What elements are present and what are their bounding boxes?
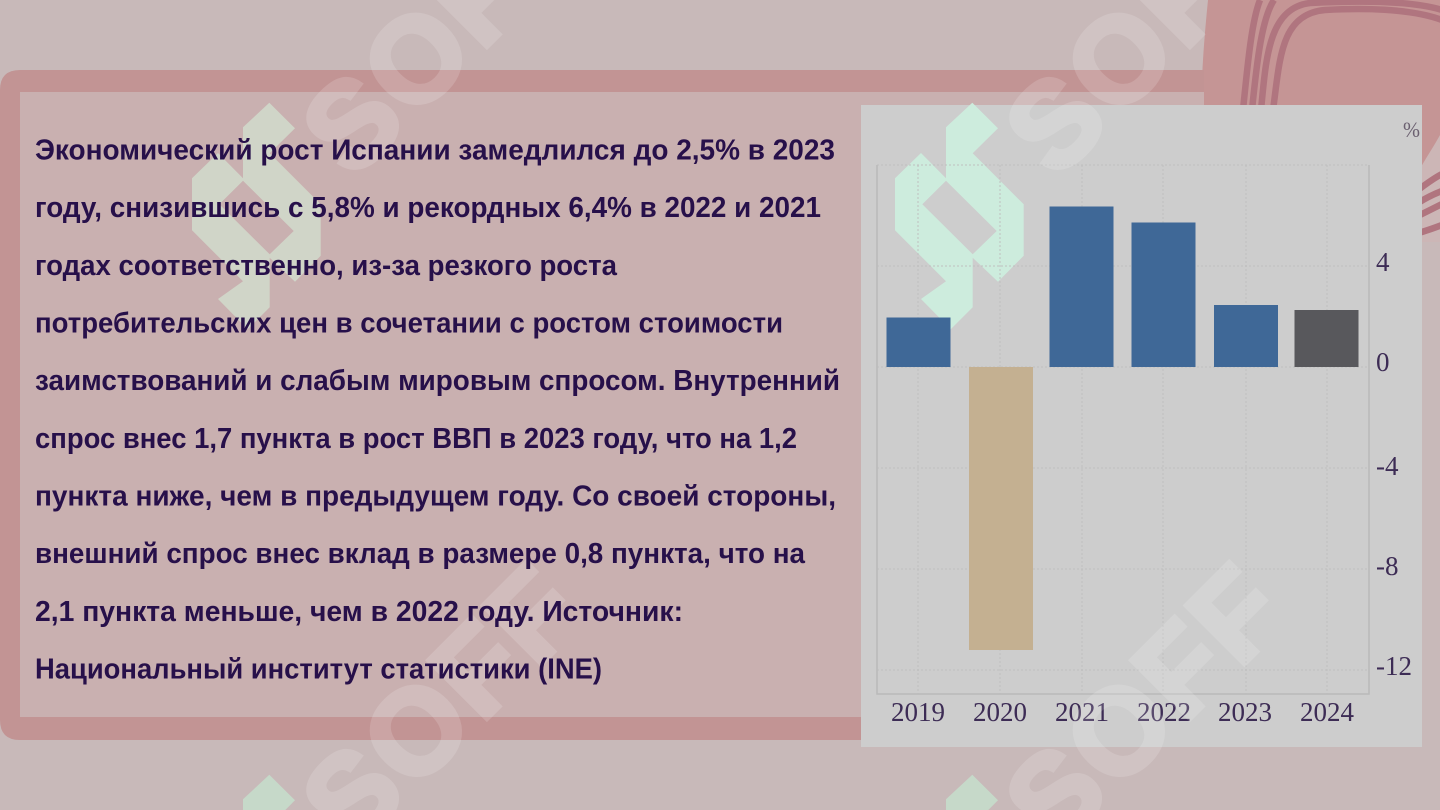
x-axis labels: 2020 (973, 697, 1027, 727)
bar 2023 (1214, 305, 1278, 367)
text block: внешний спрос внес вклад в размере 0,8 пункта, что на (35, 538, 806, 570)
x-axis labels (891, 697, 1354, 727)
text block: спрос внес 1,7 пункта в рост ВВП в 2023 году, что на 1,2 (35, 423, 797, 455)
panel: chart background (861, 105, 1422, 747)
y-axis labels: -8 (1376, 551, 1398, 581)
text block: Экономический рост Испании замедлился до 2,5% в 2023 (35, 134, 835, 166)
bar 2019 (886, 318, 950, 367)
text block: пункта ниже, чем в предыдущем году. Со своей стороны, (35, 480, 836, 512)
watermark logo: over chart (895, 103, 1024, 329)
y-axis labels: -12 (1376, 651, 1412, 681)
text block: Национальный институт статистики (INE) (35, 654, 602, 686)
bar 2020 (969, 367, 1033, 650)
x-axis labels: 2019 (891, 697, 945, 727)
x-axis labels: 2023 (1218, 697, 1272, 727)
x-axis labels: 2024 (1300, 697, 1354, 727)
y-axis labels: % (1403, 117, 1420, 142)
bar 2021 (1050, 206, 1114, 367)
text block: 2,1 пункта меньше, чем в 2022 году. Источник: (35, 596, 683, 628)
chart grid (877, 165, 1369, 694)
y-axis labels: -4 (1376, 451, 1399, 481)
y-axis labels (1376, 117, 1420, 681)
chart axes (877, 165, 1369, 694)
panel: text card (0, 70, 1204, 740)
bar chart (877, 117, 1420, 727)
bar 2024 (1294, 310, 1358, 367)
x-axis labels: 2021 (1055, 697, 1109, 727)
text block: годах соответственно, из-за резкого роста (35, 250, 618, 282)
text block (35, 134, 840, 686)
decorative blob: top right (1201, 0, 1440, 242)
text block: году, снизившись с 5,8% и рекордных 6,4% в 2022 и 2021 (35, 192, 821, 224)
text block: потребительских цен в сочетании с ростом стоимости (35, 308, 783, 340)
x-axis labels: 2022 (1137, 697, 1191, 727)
bar 2022 (1132, 222, 1196, 367)
watermark logo: bottom right (946, 775, 998, 810)
y-axis labels: 4 (1376, 247, 1390, 277)
text block: заимствований и слабым мировым спросом. Внутренний (35, 365, 840, 397)
watermark logo: left (192, 103, 321, 329)
y-axis labels: 0 (1376, 347, 1390, 377)
watermark logo: bottom left (243, 775, 295, 810)
